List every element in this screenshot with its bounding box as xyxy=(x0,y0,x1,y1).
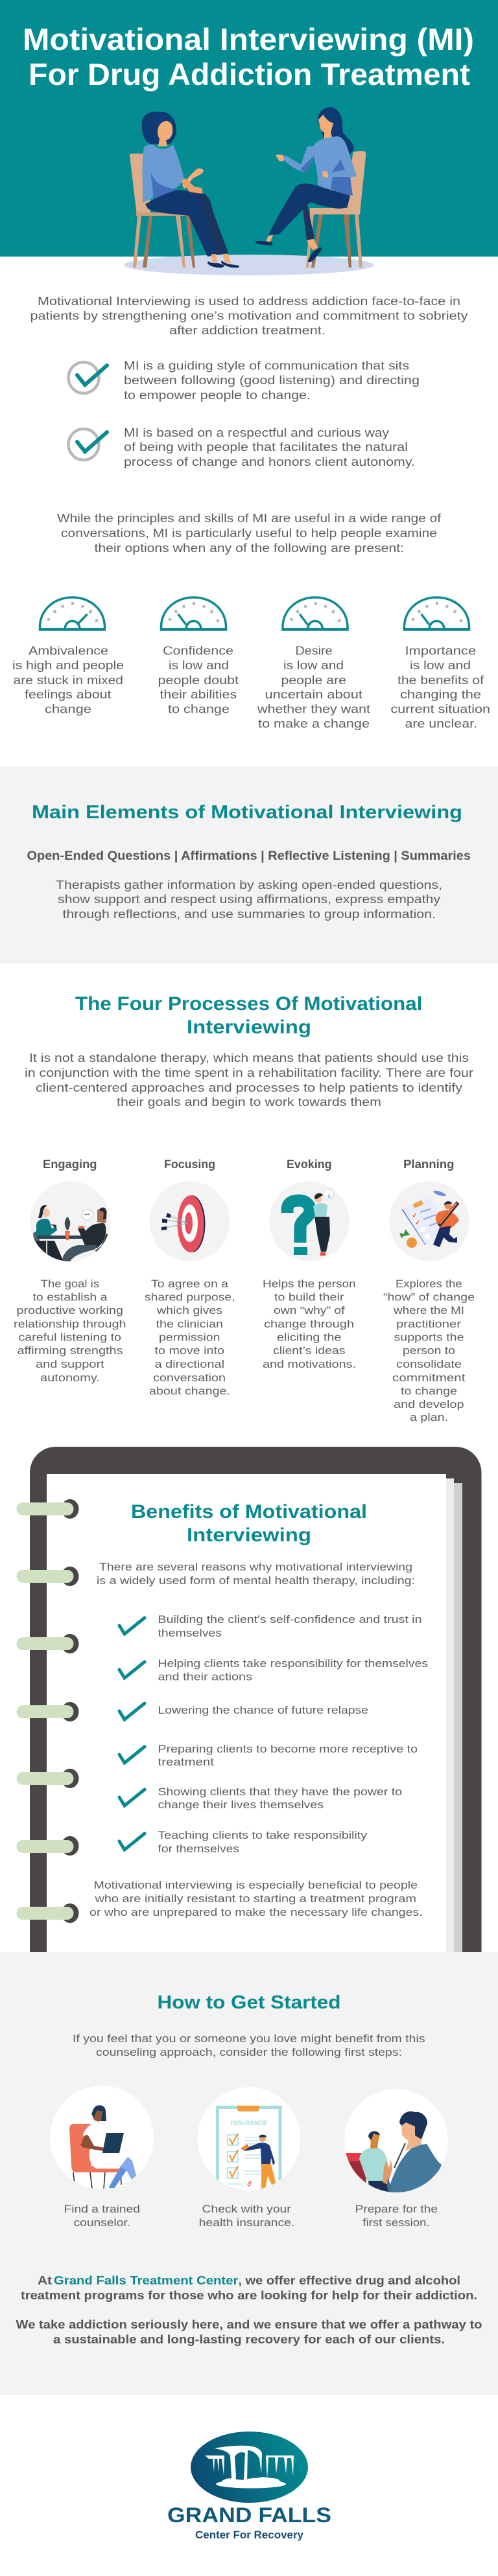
title xyxy=(23,22,474,91)
text block: the clinician xyxy=(156,1318,223,1330)
illustration: woman with tablet in chair xyxy=(50,2086,154,2189)
column: desire: Desire xyxy=(296,644,332,657)
benefit: self-confidence xyxy=(119,1613,421,1639)
panel: hero header xyxy=(0,0,498,275)
text block: client’s ideas xyxy=(273,1344,345,1357)
text block: Grand Falls offer: At xyxy=(38,2274,52,2287)
caption xyxy=(199,2203,294,2229)
caption: first session. xyxy=(362,2216,430,2229)
illustration: person with giant checklist and pencil xyxy=(389,1181,469,1261)
text block: relationship through xyxy=(14,1318,126,1330)
benefit: responsibility: for themselves xyxy=(158,1843,239,1855)
intro paragraph: Motivational Interviewing is used to address addiction face-to-face in xyxy=(38,295,460,308)
text block: If you feel that you or someone you love might benefit from this xyxy=(73,2032,425,2045)
icon: check in circle xyxy=(69,429,107,460)
title: Motivational Interviewing (MI) xyxy=(23,22,474,56)
step: check insurance xyxy=(197,2087,301,2229)
illustration: client and therapist xyxy=(344,2089,448,2198)
column: ambivalence: Ambivalence xyxy=(29,644,108,657)
text block: commitment xyxy=(392,1372,466,1384)
text block: especially beneficial: Motivational interviewing is especially beneficial to people xyxy=(93,1879,418,1891)
text block: standalone therapy: client-centered approaches and processes to help patients to identify xyxy=(36,1081,462,1094)
caption: Prepare for the xyxy=(355,2203,438,2215)
caption xyxy=(64,2203,140,2229)
text block: eliciting the xyxy=(277,1331,341,1344)
point: guiding style of communication xyxy=(69,359,420,402)
text block: show support and respect using affirmations, express empathy xyxy=(58,893,440,906)
text block: Grand Falls offer: We take addiction seriously here, and we ensure that we offer a pathway to xyxy=(16,2318,482,2331)
column: importance: are unclear. xyxy=(405,717,477,730)
column: importance xyxy=(390,597,490,730)
text block: careful listening to xyxy=(18,1331,121,1344)
intro paragraph: patients by strengthening one’s motivation and commitment to sobriety xyxy=(30,310,468,323)
text block: Grand Falls offer: , we offer effective drug and alcohol xyxy=(238,2274,460,2287)
column: planning xyxy=(383,1158,475,1423)
column: importance: Importance xyxy=(405,644,476,657)
point: respectful and curious way xyxy=(69,426,415,468)
text block: Grand Falls offer: a sustainable and long-lasting recovery for each of our clients. xyxy=(53,2333,445,2346)
paragraph: when MI is useful: conversations, MI is particularly useful to help people examine xyxy=(61,527,437,540)
paragraph: when MI is useful: While the principles and skills of MI are useful in a wide range of xyxy=(57,512,442,525)
paragraph: when MI is useful: their options when any of the following are present: xyxy=(95,542,404,555)
benefit: responsibility and actions: Helping clients take responsibility for themselves xyxy=(158,1657,428,1670)
icon: gauge needle left xyxy=(281,597,349,630)
benefit: receptive: treatment xyxy=(158,1756,214,1768)
caption: health insurance. xyxy=(199,2216,294,2229)
column: desire: whether they want xyxy=(257,702,370,715)
column: ambivalence: change xyxy=(45,702,91,715)
heading: Main Elements of Motivational Interviewing xyxy=(32,802,462,823)
column: importance: current situation xyxy=(390,702,490,715)
illustration: question mark and person: ¿ xyxy=(327,1191,331,1199)
intro paragraph: after addiction treatment. xyxy=(169,324,326,337)
point: guiding style of communication: MI is a guiding style of communication that sits xyxy=(124,359,409,372)
text block: reasons: There are several reasons why motivational interviewing xyxy=(99,1561,412,1573)
icon: gauge needle right xyxy=(39,597,106,630)
icon: gauge needle left xyxy=(160,597,227,630)
benefit: responsibility xyxy=(119,1829,368,1855)
point: respectful and curious way: MI is based on a respectful and curious way xyxy=(124,426,389,439)
text block: Helps the person xyxy=(263,1278,356,1290)
caption: counselor. xyxy=(74,2216,130,2229)
heading: four processes: The Four Processes Of Motivational xyxy=(75,993,423,1015)
text block: to move into xyxy=(154,1344,224,1357)
wordmark: GRAND FALLS xyxy=(167,2503,331,2527)
caption: Find a trained xyxy=(64,2203,140,2215)
text block xyxy=(263,1278,356,1370)
benefit: responsibility and actions xyxy=(119,1657,428,1683)
text block: own “why” of xyxy=(274,1304,345,1317)
text block: shared purpose, xyxy=(145,1291,235,1304)
text block: The goal is xyxy=(41,1278,99,1290)
heading: four processes: Interviewing xyxy=(187,1017,311,1038)
illustration: two people at a table: ••• xyxy=(84,1212,90,1217)
text block: conversation xyxy=(153,1372,226,1384)
column: focusing xyxy=(145,1158,235,1397)
point: respectful and curious way: process of change and honors client autonomy. xyxy=(124,455,415,468)
column: confidence: people doubt xyxy=(158,674,239,687)
column: engaging xyxy=(14,1158,126,1384)
text block: reasons: is a widely used form of mental health therapy, including: xyxy=(97,1574,415,1587)
text block xyxy=(56,879,442,921)
illustration: two people at a table xyxy=(30,1181,110,1261)
intro paragraph xyxy=(30,295,468,337)
illustration: question mark and person xyxy=(269,1181,350,1261)
column: importance: is low and xyxy=(410,659,471,672)
benefit: relapse xyxy=(119,1703,368,1719)
benefit: power to change: Showing clients that they have the power to xyxy=(158,1786,402,1798)
text block: Explores the xyxy=(396,1278,462,1290)
paragraph: when MI is useful xyxy=(57,512,442,555)
title: For Drug Addiction Treatment xyxy=(29,57,470,91)
column: confidence: is low and xyxy=(169,659,229,672)
benefit: responsibility and actions: and their actions xyxy=(158,1670,252,1683)
column: desire: to make a change xyxy=(258,717,370,730)
text block: especially beneficial: or who are unprepared to make the necessary life changes. xyxy=(89,1906,423,1918)
column: ambivalence: are stuck in mixed xyxy=(13,674,123,687)
column: importance: changing the xyxy=(400,688,481,701)
caption: Check with your xyxy=(202,2203,291,2215)
column: planning: Planning xyxy=(403,1158,454,1171)
heading: Benefits of Motivational xyxy=(131,1501,367,1523)
column: evoking xyxy=(263,1158,356,1370)
point: respectful and curious way: of being with people that facilitates the natural xyxy=(124,441,408,454)
text block: about change. xyxy=(149,1385,230,1397)
text block: and develop xyxy=(394,1398,464,1410)
column: desire xyxy=(257,597,370,730)
text block: Grand Falls offer xyxy=(16,2274,482,2346)
panel: benefits notebook xyxy=(17,1447,481,1952)
text block: where the MI xyxy=(393,1304,464,1317)
column: confidence: to change xyxy=(168,702,230,715)
text block: practitioner xyxy=(396,1318,461,1330)
heading: How to Get Started xyxy=(157,1992,341,2013)
text block: To agree on a xyxy=(151,1278,229,1290)
text block: Therapists gather information by asking open-ended questions, xyxy=(56,879,442,891)
icon: gauge needle left xyxy=(403,597,470,630)
text block: especially beneficial xyxy=(89,1879,423,1918)
spiral rings xyxy=(17,1499,79,1923)
text block: to build their xyxy=(274,1291,344,1304)
benefit: power to change xyxy=(119,1786,402,1811)
point: guiding style of communication: to empower people to change. xyxy=(124,389,311,402)
text block: productive working xyxy=(17,1304,123,1317)
text block: permission xyxy=(159,1331,220,1344)
text block: and support xyxy=(36,1358,104,1370)
illustration: insurance checklist: INSURANCE xyxy=(231,2120,267,2127)
caption xyxy=(355,2203,438,2229)
illustration: insurance checklist xyxy=(197,2087,301,2193)
column: importance: the benefits of xyxy=(397,674,484,687)
text block: standalone therapy: their goals and begin to work towards them xyxy=(117,1096,381,1109)
subheading: four elements: Open-Ended Questions | Affirmations | Reflective Listening | Summaries xyxy=(27,849,471,863)
text block xyxy=(145,1278,235,1397)
benefit: power to change: change their lives themselves xyxy=(158,1799,324,1811)
text block: Grand Falls offer: Grand Falls Treatment Center xyxy=(54,2274,238,2287)
logo: Grand Falls Center For Recovery xyxy=(167,2432,331,2541)
text block: Grand Falls offer: treatment programs for those who are looking for help for their addiction. xyxy=(21,2289,477,2302)
column: confidence: their abilities xyxy=(160,688,237,701)
column: confidence: Confidence xyxy=(163,644,233,657)
heading xyxy=(131,1501,367,1546)
illustration: target with arrows xyxy=(149,1181,230,1261)
illustration: two women seated in conversation xyxy=(124,107,374,275)
column: evoking: Evoking xyxy=(287,1158,332,1171)
text block: autonomy. xyxy=(40,1372,100,1384)
heading: four processes xyxy=(75,993,423,1038)
text block: person to xyxy=(403,1344,455,1357)
text block: reasons xyxy=(97,1561,415,1587)
text block: to establish a xyxy=(32,1291,108,1304)
text block: consolidate xyxy=(396,1358,462,1370)
text block: standalone therapy: in conjunction with the time spent in a rehabilitation facility. There are four xyxy=(25,1066,473,1079)
text block xyxy=(73,2032,425,2058)
text block: affirming strengths xyxy=(17,1344,123,1357)
column: ambivalence: is high and people xyxy=(12,659,124,672)
benefit: relapse: Lowering the chance of future relapse xyxy=(158,1704,368,1716)
text block: standalone therapy: It is not a standalone therapy, which means that patients should use this xyxy=(29,1052,469,1064)
benefit: receptive: Preparing clients to become more receptive to xyxy=(158,1743,418,1755)
benefit: receptive xyxy=(119,1743,418,1768)
text block: to change xyxy=(401,1385,457,1397)
text block: supports the xyxy=(394,1331,464,1344)
icon: check in circle xyxy=(69,362,107,393)
text block: counseling approach, consider the following first steps: xyxy=(96,2046,402,2058)
panel: main elements xyxy=(0,766,498,963)
panel: how to get started xyxy=(0,1952,498,2395)
text block xyxy=(383,1278,475,1423)
step: prepare for first session xyxy=(344,2089,448,2229)
column: focusing: Focusing xyxy=(164,1158,215,1171)
column: engaging: Engaging xyxy=(43,1158,97,1171)
text block: which gives xyxy=(156,1304,222,1317)
text block: standalone therapy xyxy=(25,1052,473,1109)
text block: change through xyxy=(264,1318,354,1330)
text block: a plan. xyxy=(410,1411,448,1423)
column: desire: is low and xyxy=(283,659,344,672)
text block: and motivations. xyxy=(263,1358,356,1370)
heading: Interviewing xyxy=(187,1524,311,1546)
text block: “how” of change xyxy=(383,1291,475,1304)
column: ambivalence: feelings about xyxy=(25,688,112,701)
column: desire: people are xyxy=(281,674,346,687)
benefit: self-confidence: themselves xyxy=(158,1627,222,1639)
step: find a counselor xyxy=(50,2086,154,2229)
column: confidence xyxy=(158,597,239,715)
column: ambivalence xyxy=(12,597,124,715)
benefit: self-confidence: Building the client's self-confidence and trust in xyxy=(158,1613,421,1626)
text block xyxy=(14,1278,126,1384)
text block: through reflections, and use summaries to group information. xyxy=(62,908,436,921)
benefit: responsibility: Teaching clients to take responsibility xyxy=(158,1829,368,1841)
point: guiding style of communication: between following (good listening) and directing xyxy=(124,374,420,387)
column: desire: uncertain about xyxy=(265,688,362,701)
icon: waterfall oval xyxy=(191,2432,308,2503)
tagline: Center For Recovery xyxy=(195,2529,304,2541)
text block: a directional xyxy=(154,1358,224,1370)
text block: especially beneficial: who are initially resistant to starting a treatment program xyxy=(94,1892,416,1905)
